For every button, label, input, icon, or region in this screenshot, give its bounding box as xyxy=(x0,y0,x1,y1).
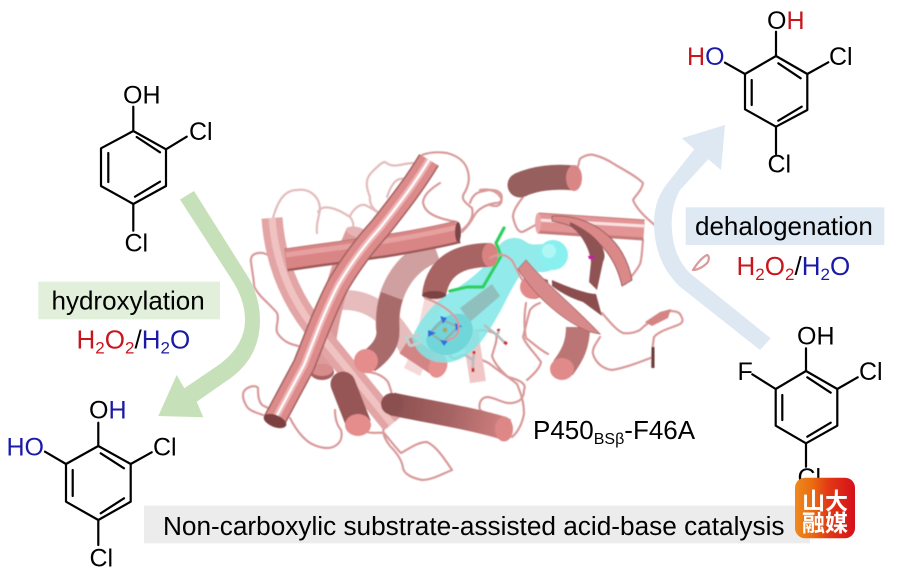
molecule: 2,4-dichlorophenol: Cl xyxy=(124,230,148,258)
molecule: 2,4-dichlorophenol: OH xyxy=(123,81,160,109)
molecule: bottom-right fluorinated substrate xyxy=(738,322,883,492)
helix: arched dark helix over heme xyxy=(422,243,530,340)
logo: watermark badge: 融媒 xyxy=(802,504,848,538)
molecule: bottom-right fluorinated substrate: F xyxy=(738,358,753,386)
reagent: H2O2/H2O left: H xyxy=(142,324,160,354)
arrow: blue dehalogenation arrow xyxy=(654,125,771,350)
reagent: H2O2/H2O right: O xyxy=(830,251,850,281)
reagent: H2O2/H2O left: H xyxy=(76,324,95,354)
molecule: bottom-left product: Cl xyxy=(90,545,113,573)
molecule: bottom-right fluorinated substrate: Cl xyxy=(859,358,883,386)
reagent: H2O2/H2O right: 2 xyxy=(785,265,794,284)
reagent: H2O2/H2O right: / xyxy=(794,251,802,281)
molecule: top-right product: HO xyxy=(687,43,725,71)
reagent: H2O2/H2O left: O xyxy=(105,324,125,354)
reagent: H2O2/H2O left: 2 xyxy=(125,338,134,357)
reagent: H2O2/H2O right: 2 xyxy=(820,265,830,284)
label: hydroxylation: hydroxylation xyxy=(52,285,205,315)
helix: horizontal helix xyxy=(286,222,461,260)
helix: dark curved helix xyxy=(354,250,436,373)
arrow: green hydroxylation arrow xyxy=(158,191,260,417)
reagent: H2O2/H2O right: 2 xyxy=(755,265,765,284)
protein structure: P450 cartoon xyxy=(243,152,683,480)
label: enzyme name: P450 xyxy=(533,415,594,445)
reagent: H2O2/H2O right: H xyxy=(802,251,820,281)
molecule: top-right product: Cl xyxy=(768,150,791,178)
molecule: top-right product: Cl xyxy=(829,43,853,71)
molecule: top-right product xyxy=(687,7,853,178)
logo: watermark badge: 山大 xyxy=(802,482,848,516)
banner: catalysis caption: Non-carboxylic substrate-assisted acid-base catalysis xyxy=(163,511,784,541)
reagent: H2O2/H2O left: 2 xyxy=(95,338,105,357)
back loops xyxy=(243,152,683,480)
molecule: bottom-right fluorinated substrate: OH xyxy=(797,322,834,350)
cyan substrate access channel surface xyxy=(412,238,568,363)
helix: lower-right cylinder xyxy=(520,275,578,380)
molecule: bottom-left product: HO xyxy=(6,434,44,462)
molecule: bottom-right fluorinated substrate: Cl xyxy=(798,464,821,492)
helix: pink right horizontal helix xyxy=(535,213,644,233)
beta sheets xyxy=(518,216,671,368)
helix: stub xyxy=(330,372,371,436)
helix: long pale helix xyxy=(272,218,392,424)
molecule: bottom-left product: OH xyxy=(89,396,127,424)
pale back helices xyxy=(310,224,478,382)
reagent: H2O2/H2O left: 2 xyxy=(160,338,170,357)
substrate sticks: green xyxy=(450,228,504,291)
small loop over blue arrow xyxy=(693,255,709,270)
label: enzyme name: -F46A xyxy=(624,415,696,445)
molecule: top-right product: OH xyxy=(767,7,805,35)
helix: dark top-right helix xyxy=(508,165,582,198)
reagent: H2O2/H2O right: O xyxy=(765,251,785,281)
molecule: 2,4-dichlorophenol: Cl xyxy=(189,118,213,146)
molecule: bottom-left product: Cl xyxy=(153,434,177,462)
reagent: H2O2/H2O left: / xyxy=(134,324,142,354)
label: dehalogenation: dehalogenation xyxy=(695,211,873,241)
heme with iron and nitrogens xyxy=(406,316,507,372)
label: hydroxylation xyxy=(38,282,220,319)
molecule: bottom-left product xyxy=(6,396,177,573)
label: enzyme name: BSβ xyxy=(594,431,624,448)
logo: watermark badge xyxy=(795,478,855,538)
helix: long dark lower helix xyxy=(381,393,513,442)
molecule: 2,4-dichlorophenol xyxy=(101,81,213,258)
reagent: H2O2/H2O right: H xyxy=(736,251,755,281)
helix: long front helix xyxy=(262,160,429,431)
reagent: H2O2/H2O left: O xyxy=(170,324,190,354)
